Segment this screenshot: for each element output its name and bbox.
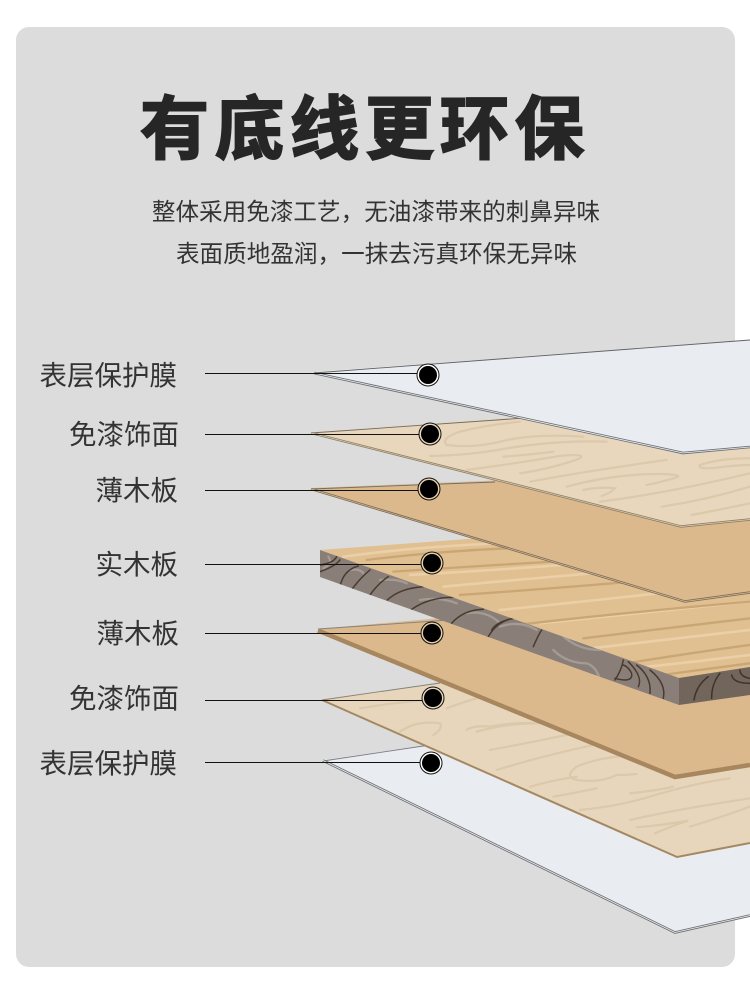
subtitle text bbox=[152, 199, 600, 268]
layer: bottom veneer finish bbox=[322, 682, 750, 858]
layer: bottom protective film bbox=[323, 700, 750, 932]
label: 表层保护膜 (top): 表层保护膜 bbox=[40, 360, 177, 391]
label: 实木板: 实木板 bbox=[96, 549, 178, 580]
label: 表层保护膜 (bottom): 表层保护膜 bbox=[40, 748, 177, 779]
layer: upper thin wood board bbox=[311, 470, 750, 602]
label: 表层保护膜 (top) bbox=[40, 360, 439, 391]
label: 免漆饰面 (bottom): 免漆饰面 bbox=[69, 683, 179, 714]
layer: upper veneer finish bbox=[310, 418, 750, 528]
layer: lower thin wood board bbox=[318, 590, 750, 777]
title: 有底线更环保 bbox=[140, 91, 590, 168]
label: 免漆饰面 (bottom) bbox=[69, 683, 444, 714]
label: 薄木板 (top): 薄木板 bbox=[96, 475, 178, 506]
label: 实木板 bbox=[96, 549, 443, 580]
layer: top protective film bbox=[314, 340, 750, 453]
label: 薄木板 (top) bbox=[96, 475, 440, 506]
label: 免漆饰面 (top) bbox=[69, 419, 441, 450]
label: 薄木板 (bottom): 薄木板 bbox=[96, 618, 179, 649]
subtitle text: 整体采用免漆工艺，无油漆带来的刺鼻异味 bbox=[152, 199, 600, 226]
subtitle text: 表面质地盈润，一抹去污真环保无异味 bbox=[176, 241, 577, 268]
label: 表层保护膜 (bottom) bbox=[40, 748, 442, 779]
layer: solid wood board bbox=[320, 538, 750, 705]
label: 薄木板 (bottom) bbox=[96, 618, 443, 649]
label: 免漆饰面 (top): 免漆饰面 bbox=[69, 419, 179, 450]
